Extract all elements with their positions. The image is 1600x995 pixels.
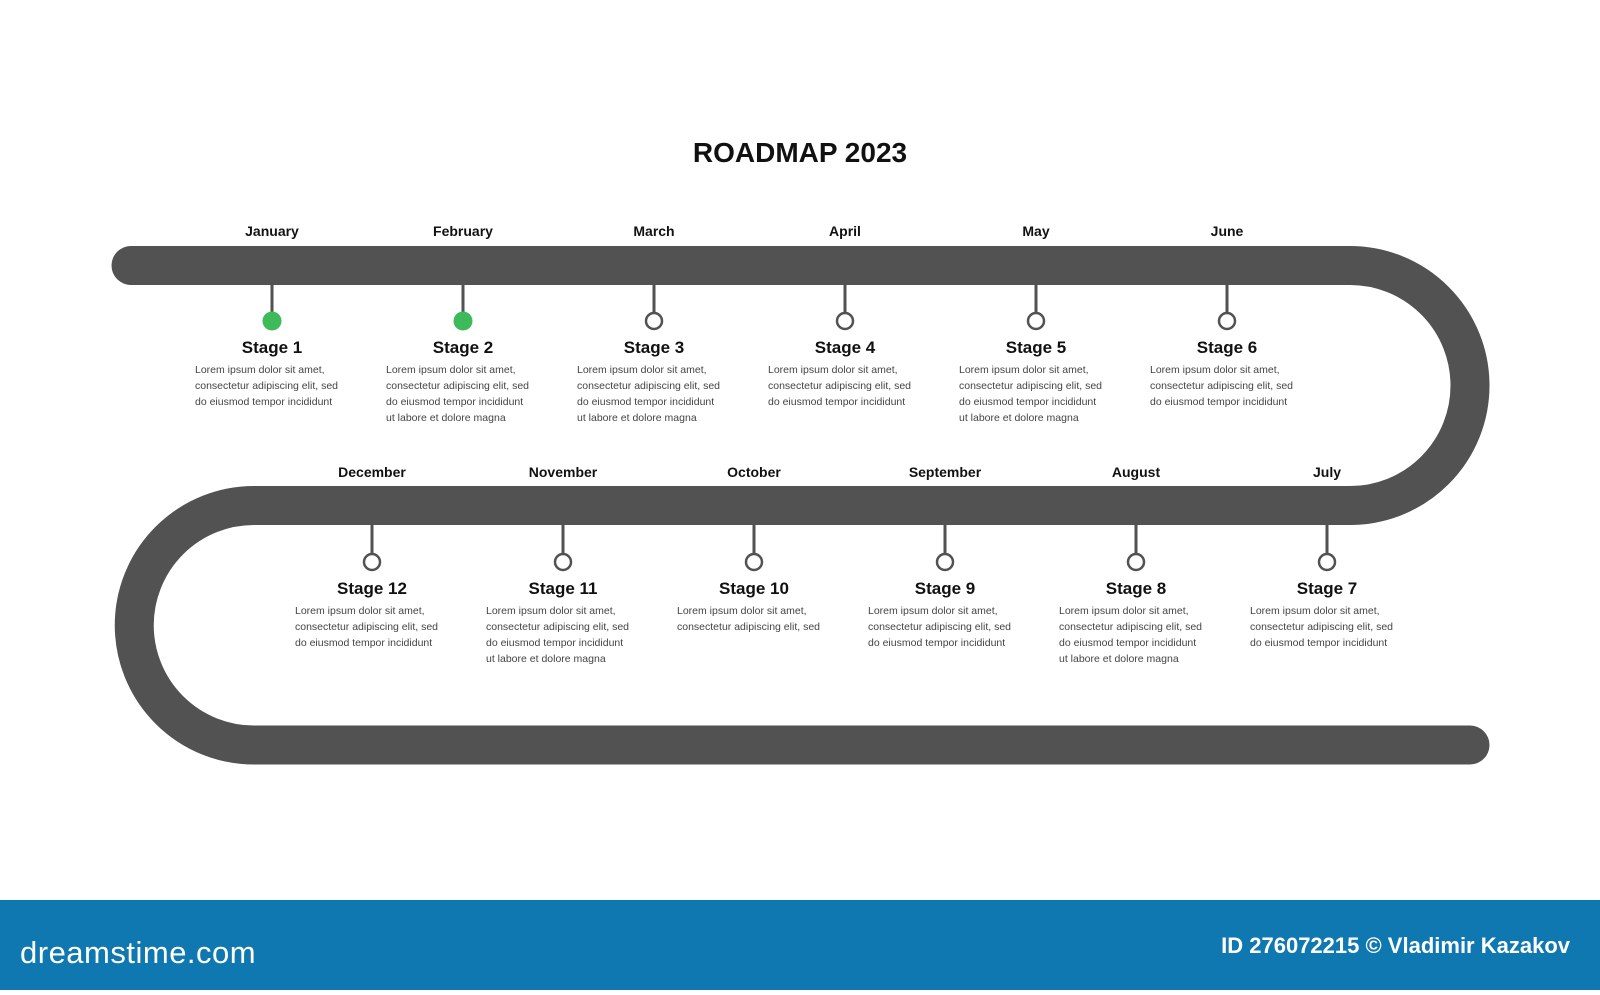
stage 12: December xyxy=(338,464,406,480)
stage 7: Lorem ipsum dolor sit amet, xyxy=(1250,605,1380,617)
stage 5: Stage 5 xyxy=(1006,338,1066,357)
stage 7: Stage 7 xyxy=(1297,579,1357,598)
footer banner xyxy=(0,900,1600,990)
stage 8: Stage 8 xyxy=(1106,579,1166,598)
stage 6: Lorem ipsum dolor sit amet, xyxy=(1150,364,1280,376)
stage 6: Stage 6 xyxy=(1197,338,1257,357)
stage 4: do eiusmod tempor incididunt xyxy=(768,396,905,408)
stage 8: August xyxy=(1112,464,1160,480)
stage 3: consectetur adipiscing elit, sed xyxy=(577,380,720,392)
stage 1: Stage 1 xyxy=(242,338,302,357)
stage 2 xyxy=(386,223,529,424)
stage 3: do eiusmod tempor incididunt xyxy=(577,396,714,408)
stage 11: Stage 11 xyxy=(528,579,598,598)
stage 5 xyxy=(959,223,1102,424)
stage 10: Lorem ipsum dolor sit amet, xyxy=(677,605,807,617)
stage 5: consectetur adipiscing elit, sed xyxy=(959,380,1102,392)
stage 7: do eiusmod tempor incididunt xyxy=(1250,637,1387,649)
stage 4: April xyxy=(829,223,861,239)
stage 3: March xyxy=(633,223,675,239)
stage 5: do eiusmod tempor incididunt xyxy=(959,396,1096,408)
stage 12: consectetur adipiscing elit, sed xyxy=(295,621,438,633)
stage 9 xyxy=(868,464,1011,649)
stage 9: do eiusmod tempor incididunt xyxy=(868,637,1005,649)
stage 9: consectetur adipiscing elit, sed xyxy=(868,621,1011,633)
stage 3: Lorem ipsum dolor sit amet, xyxy=(577,364,707,376)
stage 3: Stage 3 xyxy=(624,338,684,357)
stage 2: February xyxy=(433,223,493,239)
stage 12: Lorem ipsum dolor sit amet, xyxy=(295,605,425,617)
stage 8: do eiusmod tempor incididunt xyxy=(1059,637,1196,649)
stage 4 xyxy=(768,223,911,408)
stage 9: Stage 9 xyxy=(915,579,975,598)
stage 1: do eiusmod tempor incididunt xyxy=(195,396,332,408)
stage 8: ut labore et dolore magna xyxy=(1059,653,1179,665)
stage 10: consectetur adipiscing elit, sed xyxy=(677,621,820,633)
stage 3: ut labore et dolore magna xyxy=(577,412,697,424)
stage 6: June xyxy=(1211,223,1244,239)
stage 2: do eiusmod tempor incididunt xyxy=(386,396,523,408)
stage 5: Lorem ipsum dolor sit amet, xyxy=(959,364,1089,376)
stage 11: November xyxy=(529,464,598,480)
stage 1: consectetur adipiscing elit, sed xyxy=(195,380,338,392)
stage 4: Stage 4 xyxy=(815,338,876,357)
stage 5: May xyxy=(1022,223,1050,239)
stage 9: September xyxy=(909,464,982,480)
stage 2: Stage 2 xyxy=(433,338,493,357)
stage 2: consectetur adipiscing elit, sed xyxy=(386,380,529,392)
stage 10: October xyxy=(727,464,781,480)
stage 11: Lorem ipsum dolor sit amet, xyxy=(486,605,616,617)
stage 12: Stage 12 xyxy=(337,579,407,598)
stage 5: ut labore et dolore magna xyxy=(959,412,1079,424)
stage 11: ut labore et dolore magna xyxy=(486,653,606,665)
stage 4: consectetur adipiscing elit, sed xyxy=(768,380,911,392)
stage 1: January xyxy=(245,223,299,239)
title: ROADMAP 2023 xyxy=(693,137,907,168)
stage 11: do eiusmod tempor incididunt xyxy=(486,637,623,649)
stage 1: Lorem ipsum dolor sit amet, xyxy=(195,364,325,376)
stage 8: consectetur adipiscing elit, sed xyxy=(1059,621,1202,633)
stage 8 xyxy=(1059,464,1202,665)
stage 10: Stage 10 xyxy=(719,579,789,598)
stage 6: do eiusmod tempor incididunt xyxy=(1150,396,1287,408)
stage 9: Lorem ipsum dolor sit amet, xyxy=(868,605,998,617)
stage 12 xyxy=(295,464,438,649)
footer logo: dreamstime.com xyxy=(20,935,256,970)
stage 2: Lorem ipsum dolor sit amet, xyxy=(386,364,516,376)
stage 7 xyxy=(1250,464,1393,649)
stage 2: ut labore et dolore magna xyxy=(386,412,506,424)
stage 3 xyxy=(577,223,720,424)
stage 7: July xyxy=(1313,464,1341,480)
stage 6 xyxy=(1150,223,1293,408)
road path xyxy=(131,266,1470,745)
stage 6: consectetur adipiscing elit, sed xyxy=(1150,380,1293,392)
stage 7: consectetur adipiscing elit, sed xyxy=(1250,621,1393,633)
stage 4: Lorem ipsum dolor sit amet, xyxy=(768,364,898,376)
stage 12: do eiusmod tempor incididunt xyxy=(295,637,432,649)
stage 10 xyxy=(677,464,820,633)
stage 11: consectetur adipiscing elit, sed xyxy=(486,621,629,633)
stage 11 xyxy=(486,464,629,665)
footer credit: ID 276072215 © Vladimir Kazakov xyxy=(1221,933,1571,958)
stage 1 xyxy=(195,223,338,408)
stage 8: Lorem ipsum dolor sit amet, xyxy=(1059,605,1189,617)
